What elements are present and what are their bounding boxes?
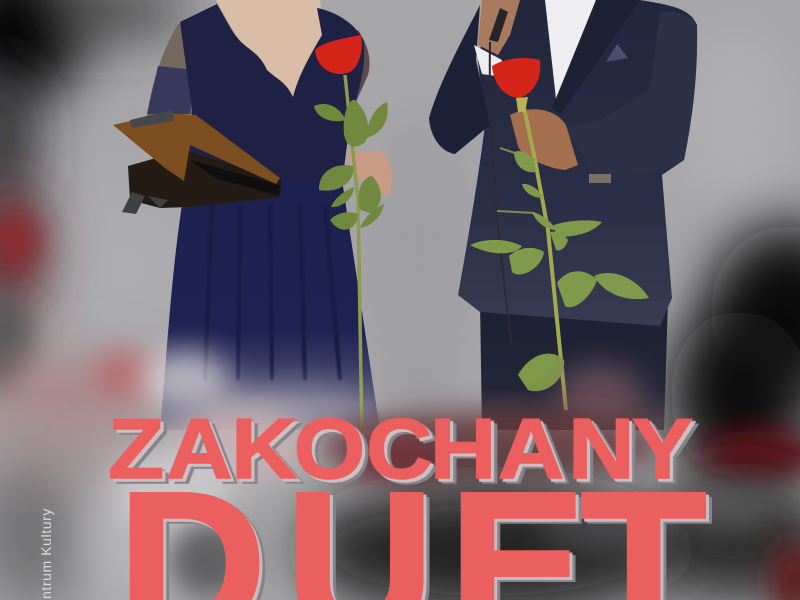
man cuff and hand with microphone [474,0,520,345]
man left sleeve [429,5,490,154]
woman bodice [180,4,364,185]
title: ZAKOCHANY: ZAKOCHANY [108,401,693,496]
woman skin neckline [216,0,324,97]
man hand holding rose [510,109,578,170]
woman rose leaves [314,100,388,230]
man rose leaves [470,151,649,391]
woman skirt [160,180,380,430]
man sleeve button [589,174,611,183]
woman lace sleeve [147,24,196,116]
man lapel [552,0,640,115]
man rose bloom [492,58,540,98]
woman rose stem [345,75,362,440]
smoke foreground [0,350,775,600]
man rose stem [522,98,566,410]
man right sleeve [560,12,697,180]
man shirt [540,0,596,108]
woman rose bloom [315,35,362,74]
man pocket square [606,44,628,62]
man jacket body [458,0,697,326]
figure: man with microphone and rose [429,0,697,430]
clipboard and stand [113,110,282,214]
woman hand [347,151,392,196]
figure: woman with clipboard and rose [113,0,392,440]
woman far sleeve [345,30,370,102]
man trousers [480,300,668,430]
